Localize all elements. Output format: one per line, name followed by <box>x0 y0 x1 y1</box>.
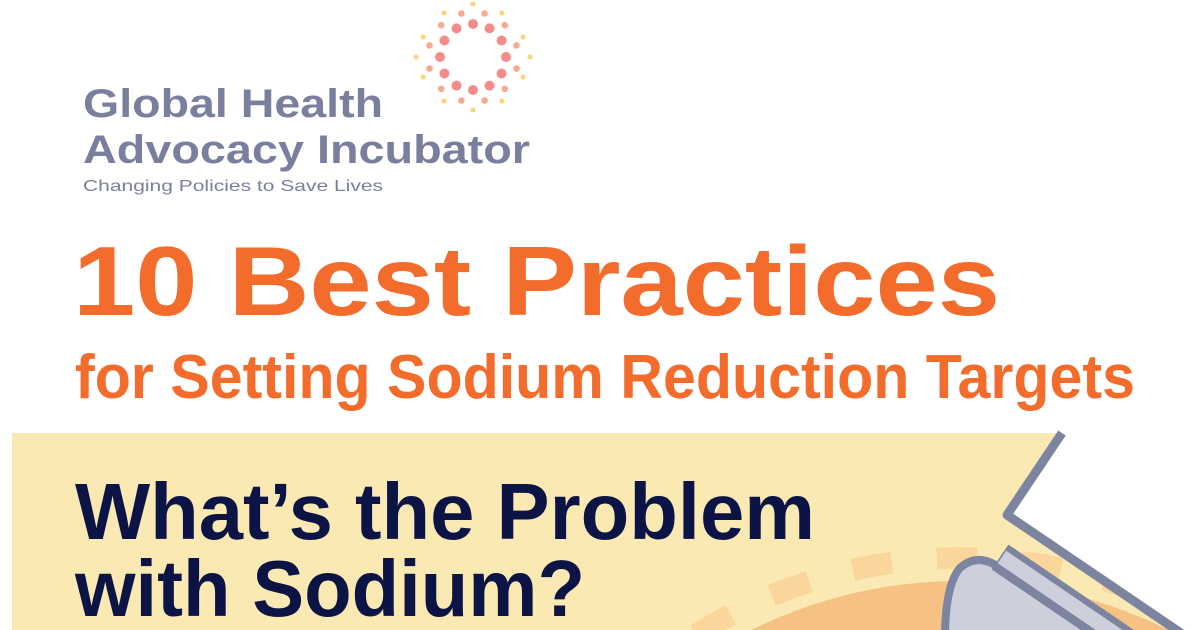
logo: name <box>83 82 530 195</box>
panel: problem banner <box>12 433 1200 630</box>
heading: problem <box>74 467 815 630</box>
subtitle: for Setting Sodium Reduction Targets <box>75 343 1135 412</box>
title: 10 Best Practices <box>73 226 1000 336</box>
logo: name: Global Health <box>83 82 383 126</box>
heading: problem: What’s the Problem <box>75 467 815 556</box>
logo: name: Advocacy Incubator <box>83 128 530 172</box>
dashed arc <box>468 558 1200 630</box>
orange sun <box>491 581 1200 630</box>
icon: salt shaker <box>945 428 1200 630</box>
logo: tagline: Changing Policies to Save Lives <box>83 178 383 195</box>
logo: sunburst <box>414 2 532 112</box>
